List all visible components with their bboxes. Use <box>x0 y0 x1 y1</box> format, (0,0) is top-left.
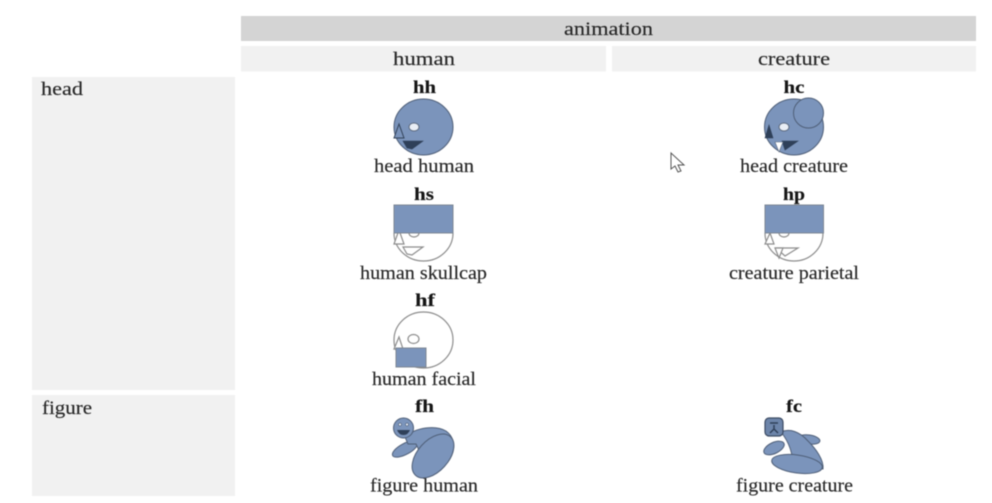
row panel: figure: figure <box>42 398 92 419</box>
item: head creature: hc <box>784 77 805 97</box>
item: human skullcap: human skullcap <box>360 263 487 284</box>
row panel: figure <box>32 395 235 496</box>
item: human facial: hf <box>415 290 436 310</box>
item: creature parietal: creature parietal <box>729 263 859 284</box>
item: figure creature: figure creature <box>736 476 853 496</box>
item: head human: head human <box>374 156 475 177</box>
item: creature parietal: hp <box>783 184 805 204</box>
item: figure human <box>370 396 479 496</box>
item: human facial: human facial <box>372 369 476 390</box>
column header: creature <box>612 46 976 72</box>
item: head human: hh <box>413 77 436 97</box>
item: head creature <box>740 77 848 177</box>
column header: human: human <box>393 49 456 70</box>
item: human skullcap <box>360 184 487 284</box>
column header: creature: creature <box>758 49 830 70</box>
item: figure human: figure human <box>370 476 479 496</box>
column header: human <box>241 46 606 72</box>
item: creature parietal <box>729 184 859 284</box>
row panel: head: head <box>41 79 84 100</box>
item: figure human: fh <box>415 396 434 416</box>
icon: mouse cursor <box>671 153 684 172</box>
item: human skullcap: hs <box>414 184 434 204</box>
item: figure creature: fc <box>786 396 802 416</box>
row panel: head <box>32 77 235 390</box>
item: head creature: head creature <box>740 156 848 177</box>
item: human facial <box>372 290 476 390</box>
header: animation: animation <box>564 19 654 40</box>
item: head human <box>374 77 475 177</box>
header: animation <box>241 16 976 41</box>
item: figure creature <box>736 396 853 496</box>
